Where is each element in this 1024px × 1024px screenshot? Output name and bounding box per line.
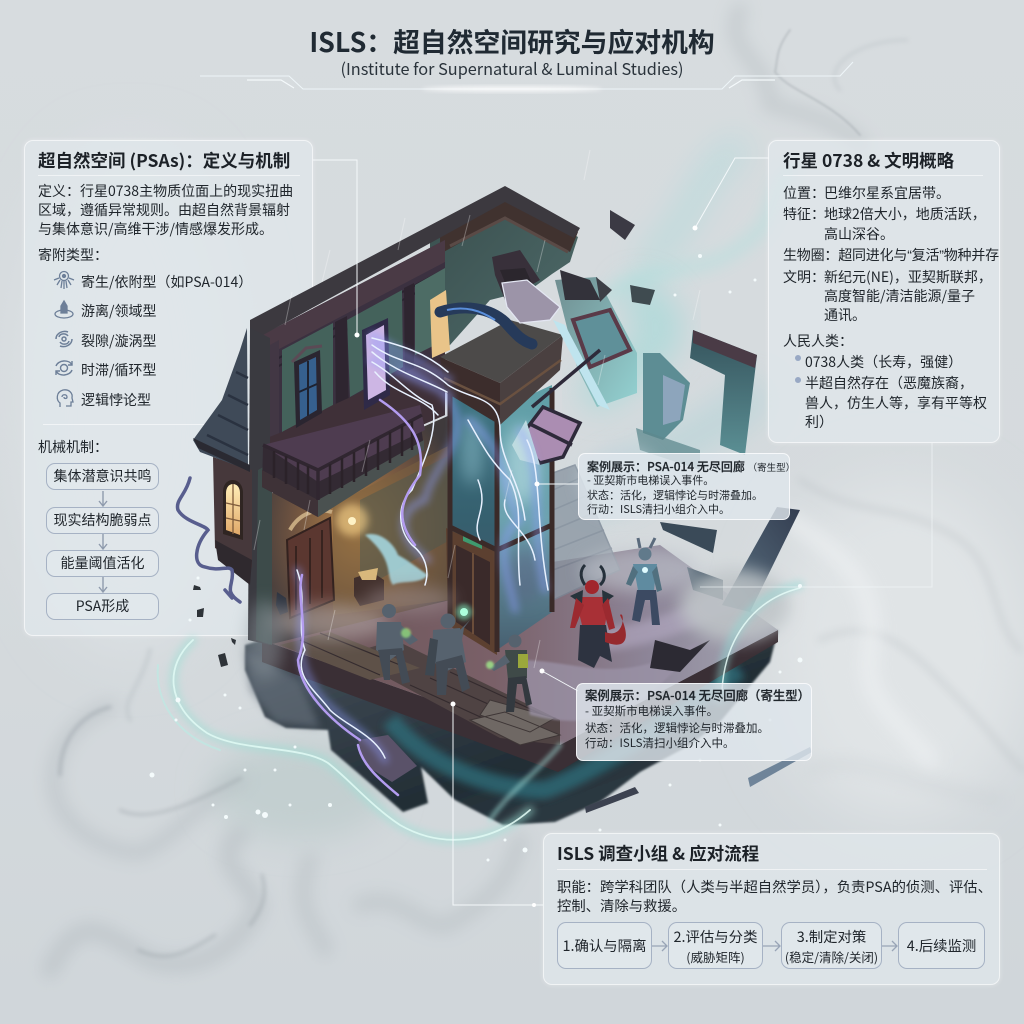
door [287, 511, 334, 618]
stairs behind elevator [553, 465, 620, 600]
callout: case study upper: 案例展示：PSA-014 无尽回廊 （寄生型） [587, 458, 795, 475]
debris cloud [193, 210, 812, 813]
label: wandering: 游离/领域型 [81, 301, 156, 321]
leader lines and anchor dots [313, 158, 932, 907]
step 2: 2.评估与分类 [674, 926, 757, 947]
floating island rock base [245, 630, 778, 825]
title block [309, 21, 715, 80]
callout: case study lower: 案例展示：PSA-014 无尽回廊（寄生型） [585, 686, 810, 704]
label: logic paradox: 逻辑悖论型 [81, 390, 151, 410]
panel: PSA definition and mechanism [24, 140, 313, 636]
definition text: 区域，遵循异常规则。由超自然背景辐射 [38, 200, 290, 220]
building: facade upper storey [262, 240, 450, 495]
upper-right smoke [735, 10, 862, 145]
definition text: 定义：行星0738主物质位面上的现实扭曲 [38, 181, 293, 201]
team description: 控制、清除与救援。 [557, 895, 686, 916]
mechanism flow [46, 463, 159, 620]
teal energy swirls [158, 585, 800, 840]
team description [557, 876, 992, 916]
overview text: 通讯。 [824, 305, 866, 325]
label: time loop: 时滞/循环型 [81, 360, 156, 380]
definition text [38, 181, 293, 239]
definition text: 与集体意识/高维干涉/情感爆发形成。 [38, 219, 273, 239]
subtitle: (Institute for Supernatural & Luminal Studies) [340, 56, 684, 80]
callout: case study upper: 状态：活化，逻辑悖论与时滞叠加。 [587, 487, 763, 503]
flow arrows [98, 491, 108, 593]
window left [292, 346, 322, 428]
step 3: 能量阈值活化 [60, 553, 144, 573]
callout: case study lower: 行动：ISLS清扫小组介入中。 [585, 735, 735, 751]
icon: logic paradox [56, 389, 74, 407]
overview text: 高度智能/清洁能源/量子 [824, 286, 975, 306]
panel: planet 0738 overview [768, 140, 1000, 443]
balcony [262, 405, 425, 517]
lower-left smoke swirl [54, 707, 241, 853]
rain streaks [254, 150, 700, 668]
overview text: 地球2倍大小，地质活跃， [824, 204, 986, 224]
step 3: 3.制定对策 [797, 926, 866, 947]
window burst [362, 318, 390, 410]
icon: parasite [54, 270, 74, 289]
left wing with turret [193, 328, 252, 585]
people list [795, 352, 987, 432]
cyan aurora [650, 150, 735, 260]
callout: case study upper: - 亚契斯市电梯误入事件。 [587, 472, 714, 488]
overview text: 位置： [783, 183, 825, 203]
panel heading: 超自然空间 (PSAs)：定义与机制 [38, 148, 290, 173]
people list: 0738人类（长寿，强健） [805, 352, 962, 372]
step 3 [781, 922, 882, 969]
soldier 3 [490, 634, 532, 712]
soldier 2 [425, 614, 470, 695]
label: vortex: 裂隙/漩涡型 [81, 331, 156, 351]
flow arrows [652, 940, 898, 952]
step 4: PSA形成 [76, 596, 129, 616]
elevator cabin [440, 320, 563, 655]
mechanism heading: 机械机制： [38, 437, 108, 457]
step 2 [668, 922, 763, 969]
callout: case study lower [576, 683, 812, 761]
step 1 [46, 463, 159, 490]
step 4: 4.后续监测 [907, 935, 976, 956]
soldier 1 [376, 604, 418, 684]
mist over the deck [247, 445, 790, 680]
step 2: (威胁矩阵) [686, 947, 745, 966]
figure: red demon [570, 565, 626, 668]
left tentacle [177, 478, 240, 602]
step 1: 1.确认与隔离 [563, 935, 646, 956]
step 2: 现实结构脆弱点 [54, 510, 152, 530]
callout: case study lower: - 亚契斯市电梯误入事件。 [585, 703, 718, 719]
overview text: 生物圈：超同进化与“复活”物种并存 [783, 245, 999, 265]
right marble veins [800, 480, 1024, 770]
people list: 半超自然存在（恶魔族裔， [805, 373, 973, 393]
type list [54, 270, 252, 410]
floor deck [262, 545, 778, 772]
building: ground-level room [268, 415, 450, 645]
icon: time loop [55, 360, 73, 376]
callout: case study upper: 行动：ISLS清扫小组介入中。 [587, 501, 730, 517]
step 3 [46, 550, 159, 577]
step 4 [898, 922, 985, 969]
title decoration lines [200, 62, 853, 92]
label: parasite: 寄生/依附型（如PSA-014） [81, 272, 252, 292]
roof slab [250, 186, 580, 345]
overview text: 巴维尔星系宜居带。 [824, 183, 950, 203]
main title: ISLS：超自然空间研究与应对机构 [309, 21, 715, 60]
glowing arched window [223, 480, 243, 540]
people list: 利） [805, 412, 833, 432]
step 1: 集体潜意识共鸣 [54, 466, 152, 486]
icon: wandering [54, 300, 74, 319]
people heading: 人民人类： [783, 331, 853, 351]
corner pillar [248, 328, 270, 645]
facade green panels [282, 268, 445, 432]
figures: ISLS soldiers [376, 604, 532, 712]
step 4 [46, 593, 159, 620]
types heading: 寄附类型： [38, 245, 108, 265]
overview text: 特征： [783, 204, 825, 224]
building: interior back wall [430, 195, 578, 360]
callout: case study lower: 状态：活化，逻辑悖论与时滞叠加。 [585, 720, 769, 736]
warm doorway [430, 290, 450, 358]
panel heading: ISLS 调查小组 & 应对流程 [557, 841, 759, 866]
lightning bolts [297, 335, 548, 795]
step 3: (稳定/清除/关闭) [785, 947, 878, 966]
figure: android [626, 538, 662, 625]
team description: 职能：跨学科团队（人类与半超自然学员），负责PSA的侦测、评估、 [557, 876, 992, 897]
overview text: 高山深谷。 [824, 224, 894, 244]
step 2 [46, 507, 159, 534]
overview text: 文明： [783, 267, 825, 287]
process flow [557, 922, 985, 969]
panel heading: 行星 0738 & 文明概略 [783, 148, 954, 173]
particles [150, 254, 802, 862]
overview text: 新纪元(NE)，亚契斯联邦， [824, 267, 992, 287]
callout: case study upper [578, 453, 790, 520]
overview text [783, 183, 999, 325]
panel: ISLS team and response process [543, 833, 1000, 985]
step 1 [557, 922, 652, 969]
icon: vortex [55, 330, 73, 348]
people list: 兽人，仿生人等，享有平等权 [805, 393, 987, 413]
